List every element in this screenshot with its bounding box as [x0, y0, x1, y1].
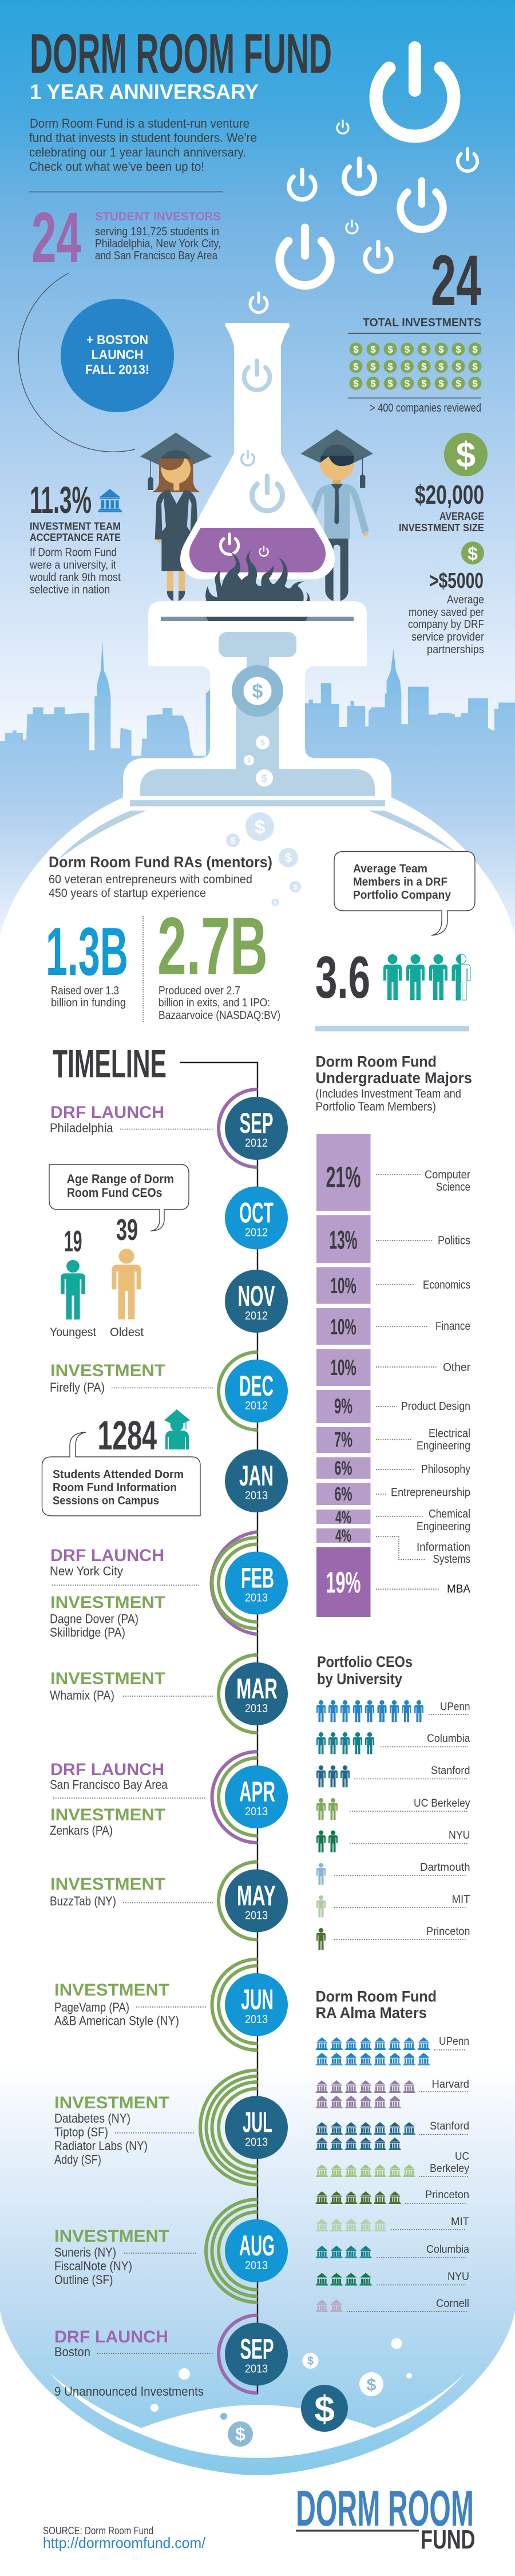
timeline node: Oct 2012: OCT [239, 1196, 274, 1228]
event: investments August: Suneris (NY) [54, 2245, 116, 2259]
event: DRF launch New York, investments: INVESTMENT [50, 1593, 165, 1612]
row: Columbia: Columbia [426, 2244, 469, 2255]
row: UC Berkeley [316, 2151, 469, 2177]
stat: average investment size: INVESTMENT SIZE [399, 522, 484, 534]
falling coins in flask: $ [293, 883, 298, 891]
event: DRF launch Boston [54, 2328, 213, 2359]
flask neck and cone [180, 323, 335, 579]
timeline node: Sep 2012: 2012 [245, 1137, 268, 1149]
bar: finance: 10% [330, 1315, 356, 1340]
stat: acceptance rate [29, 479, 122, 596]
age figures: Youngest [50, 1326, 96, 1339]
collector tray [140, 769, 375, 796]
power icons in flask [241, 361, 283, 511]
stat: student investors: STUDENT INVESTORS [95, 210, 221, 223]
timeline node: Oct 2012: 2012 [245, 1226, 268, 1239]
stat: money saved: partnerships [427, 643, 484, 656]
stat: money saved: $ [468, 543, 478, 564]
row: NYU: NYU [447, 2271, 469, 2283]
row: Stanford [316, 1765, 470, 1787]
timeline node: Nov 2012: 2012 [245, 1310, 268, 1322]
bar: politics [316, 1215, 470, 1263]
timeline node: Sep 2013: SEP [240, 2333, 274, 2365]
white mound in fluid [49, 2373, 466, 2458]
row: MIT: MIT [452, 1894, 470, 1906]
timeline node: Dec 2012: 2012 [245, 1400, 268, 1412]
event: DRF launch New York, investments: New York City [50, 1564, 123, 1578]
event: DRF launch New York, investments: Skillbridge (PA) [50, 1625, 125, 1639]
valve coin: $ [252, 681, 263, 702]
timeline node: Jan 2013: JAN [239, 1460, 274, 1492]
row: UPenn [316, 2036, 469, 2065]
stat: acceptance rate: If Dorm Room Fund [30, 546, 117, 559]
chart heading: portfolio CEOs: by University [317, 1670, 402, 1688]
bar: chemical engineering: 4% [335, 1507, 351, 1527]
bar: economics: Economics [423, 1279, 470, 1291]
bar: chemical engineering [316, 1507, 470, 1533]
dollar coin grid: $$$$$$$$ [353, 344, 478, 355]
callout: information sessions: Students Attended Dorm [53, 1468, 184, 1481]
power icons in liquid [220, 534, 268, 556]
callout: age range of CEOs: Age Range of Dorm [66, 1172, 174, 1186]
falling coins in flask: $ [231, 836, 236, 846]
graduate: man [300, 429, 373, 601]
bubbles and coins in fluid: $ [307, 2355, 314, 2368]
row: UPenn: UPenn [440, 1701, 470, 1713]
timeline node: Apr 2013: APR [239, 1776, 275, 1808]
row: MIT: MIT [451, 2216, 469, 2228]
icons: people [383, 954, 470, 1000]
event: investments August: FiscalNote (NY) [54, 2259, 132, 2273]
event: investment BuzzTab [50, 1875, 213, 1909]
event: investments July: Databetes (NY) [54, 2111, 130, 2125]
age figures: 19 [64, 1225, 82, 1258]
timeline node: May 2013 [219, 1862, 288, 1939]
bar: product design: Product Design [401, 1400, 470, 1413]
bar: chemical engineering: Engineering [417, 1520, 470, 1533]
event: investments July [54, 2093, 194, 2167]
footer logo [296, 2480, 475, 2554]
bar: entrepreneurship: 6% [334, 1484, 352, 1506]
timeline heading: TIMELINE [53, 1041, 167, 1086]
bar: electrical engineering: 7% [334, 1428, 352, 1452]
row: UC Berkeley: UC [455, 2151, 469, 2163]
event: investments July: Radiator Labs (NY) [54, 2139, 148, 2153]
Boston launch badge [61, 299, 174, 412]
chart heading: RA alma maters [316, 1988, 437, 2021]
row: MIT [316, 2216, 469, 2231]
row: NYU: NYU [449, 1830, 470, 1842]
event: DRF launch Philadelphia: DRF LAUNCH [50, 1103, 164, 1122]
callout: average team members: Members in a DRF [353, 876, 447, 888]
bottom fluid of flask [0, 2061, 515, 2475]
event: investment PageVamp, A&B: A&B American Style (NY) [54, 2014, 179, 2028]
timeline node: Jun 2013 [212, 1959, 288, 2050]
tray shelf [130, 800, 385, 806]
timeline node: Sep 2013: 2013 [245, 2363, 268, 2376]
stat: student investors: and San Francisco Bay Area [95, 250, 218, 262]
bar: product design [316, 1390, 470, 1423]
chart heading: RA alma maters: RA Alma Maters [316, 2004, 427, 2021]
graduate: woman [140, 433, 212, 601]
event: DRF launch Boston: DRF LAUNCH [54, 2328, 168, 2346]
stat: total investments: TOTAL INVESTMENTS [363, 317, 481, 329]
bubbles and coins in fluid: $ [367, 2376, 377, 2395]
falling coins in chute: $ [247, 757, 251, 764]
bar: economics [316, 1267, 470, 1304]
bar: philosophy [316, 1457, 470, 1479]
falling coins in flask: $ [274, 900, 277, 906]
timeline node: Mar 2013: 2013 [245, 1702, 268, 1715]
stat: exits 2.7B [157, 901, 280, 1022]
row: NYU [316, 2271, 469, 2285]
chart: RA alma maters [316, 2036, 469, 2312]
timeline node: Feb 2013: FEB [241, 1562, 274, 1594]
mentors heading: 60 veteran entrepreneurs with combined [49, 873, 252, 886]
bar: other: 10% [330, 1356, 356, 1380]
flask burner and lower flask body [0, 601, 515, 2576]
stat: acceptance rate: INVESTMENT TEAM [30, 521, 121, 532]
event: DRF launch San Francisco, investment [50, 1760, 206, 1838]
stat: exits 2.7B: 2.7B [157, 901, 268, 992]
bar: entrepreneurship [316, 1483, 470, 1506]
row: Stanford: Stanford [431, 1765, 470, 1777]
timeline node: Oct 2012 [225, 1186, 288, 1249]
bar: electrical engineering: Electrical [429, 1428, 470, 1440]
event: DRF launch San Francisco, investment: INVESTMENT [50, 1805, 165, 1824]
stat: acceptance rate: would rank 9th most [29, 571, 121, 584]
age figures: Oldest [110, 1326, 144, 1339]
bar: computer science: Computer [425, 1169, 470, 1182]
valve stem [247, 657, 269, 669]
stat: total investments: > 400 companies reviewed [370, 402, 481, 414]
stat: 3.6 team members: 3.6 [315, 945, 370, 1011]
event: DRF launch San Francisco, investment: San Francisco Bay Area [50, 1777, 168, 1792]
thin arc around Boston badge [18, 273, 135, 452]
timeline node: Aug 2013: AUG [239, 2230, 275, 2262]
bar: chemical engineering: Chemical [429, 1508, 470, 1520]
intro text: Check out what we've been up to! [29, 159, 204, 174]
event: investments August: Outline (SF) [54, 2273, 113, 2287]
stat: exits 2.7B: billion in exits, and 1 IPO: [159, 997, 270, 1009]
timeline spine [180, 1062, 258, 2394]
timeline node: Aug 2013 [206, 2199, 288, 2302]
event: DRF launch New York, investments: DRF LAUNCH [50, 1546, 164, 1565]
dollar coin grid [349, 342, 482, 390]
chart heading: undergraduate majors: Dorm Room Fund [316, 1053, 437, 1070]
bar: finance [316, 1308, 470, 1345]
event: DRF launch Philadelphia: Philadelphia [50, 1121, 113, 1135]
row: Harvard [316, 2079, 469, 2108]
footer logo: FUND [421, 2524, 475, 2554]
bar: entrepreneurship: Entrepreneurship [391, 1486, 470, 1499]
bubbles and coins in fluid [150, 2338, 412, 2447]
stat: average investment size: AVERAGE [439, 511, 484, 522]
right inner flask highlight [369, 811, 458, 854]
event: DRF launch Boston: Boston [54, 2345, 90, 2359]
intro text: fund that invests in student founders. We're [29, 131, 257, 145]
bubbles and coins in fluid: $ [314, 2388, 335, 2429]
timeline node: Dec 2012 [219, 1352, 288, 1430]
callout: average team members: Average Team [353, 863, 427, 875]
intro text: Dorm Room Fund is a student-run venture [30, 116, 249, 131]
chart heading: RA alma maters: Dorm Room Fund [316, 1988, 437, 2005]
row: Columbia [316, 1732, 470, 1754]
intro text [29, 116, 257, 174]
bar: MBA: 19% [326, 1566, 360, 1599]
timeline node: Sep 2013 [219, 2315, 288, 2393]
stat: money saved: company by DRF [408, 618, 484, 631]
bar: information systems: Information [417, 1541, 470, 1554]
bar: finance: Finance [435, 1320, 470, 1333]
bar: computer science [316, 1134, 470, 1211]
chart heading: undergraduate majors: Undergraduate Majors [316, 1069, 472, 1086]
source credit: SOURCE: Dorm Room Fund [43, 2525, 153, 2537]
stat: money saved: service provider [411, 631, 484, 643]
bar: MBA [316, 1547, 471, 1617]
callout: information sessions: Room Fund Information [53, 1481, 177, 1494]
chart: undergraduate majors [316, 1134, 471, 1617]
row: UPenn: UPenn [439, 2036, 469, 2048]
burner slot flame shadow [206, 617, 308, 621]
event: investments July: Addy (SF) [54, 2152, 101, 2167]
row: Dartmouth [316, 1862, 470, 1885]
event: investment Whamix: INVESTMENT [50, 1669, 165, 1688]
subtitle: 1 YEAR ANNIVERSARY [30, 80, 259, 104]
event: DRF launch San Francisco, investment: DRF LAUNCH [50, 1760, 164, 1779]
row: UC Berkeley: Berkeley [430, 2163, 469, 2175]
stat: raised 1.3B [46, 914, 128, 1009]
event: investment BuzzTab: INVESTMENT [50, 1875, 165, 1894]
chart heading: portfolio CEOs: Portfolio CEOs [317, 1653, 413, 1670]
row: Princeton: Princeton [426, 1926, 470, 1938]
falling coins in flask [226, 812, 301, 906]
event: investments August: INVESTMENT [54, 2227, 169, 2246]
event: investment PageVamp, A&B [54, 1981, 206, 2028]
bar: information systems: 4% [335, 1526, 351, 1546]
timeline node: Apr 2013: 2013 [245, 1805, 268, 1818]
row: Cornell [316, 2298, 469, 2312]
falling coins in chute: $ [262, 773, 268, 785]
callout: information sessions: Sessions on Campus [53, 1495, 159, 1507]
timeline node: Sep 2012 [219, 1089, 288, 1167]
chart heading: undergraduate majors [316, 1053, 472, 1113]
dollar coin grid: $$$$$$$$ [353, 361, 478, 372]
power icons rising [250, 48, 477, 313]
event: DRF launch San Francisco, investment: Zenkars (PA) [50, 1823, 113, 1838]
coin chute [236, 707, 279, 770]
event: investment Firefly: INVESTMENT [50, 1361, 165, 1380]
stat: average investment size: $20,000 [415, 480, 484, 509]
stat: 3.6 team members [316, 954, 470, 1001]
bar: other: Other [443, 1361, 470, 1374]
bar: electrical engineering: Engineering [417, 1440, 470, 1452]
bar: philosophy: Philosophy [421, 1463, 470, 1476]
mentors heading: Dorm Room Fund RAs (mentors) [49, 854, 272, 871]
timeline node: Jun 2013: JUN [241, 1984, 274, 2016]
event: DRF launch Philadelphia [50, 1103, 213, 1135]
burner slot [161, 617, 354, 621]
stat: raised 1.3B: billion in funding [51, 997, 126, 1009]
stat: student investors [31, 198, 221, 278]
stat: total investments [348, 241, 482, 414]
row: Columbia: Columbia [427, 1733, 470, 1745]
timeline node: Feb 2013 [211, 1532, 288, 1634]
city skyline [0, 640, 515, 950]
timeline node: Dec 2012: DEC [239, 1370, 274, 1402]
bar: politics: Politics [438, 1234, 470, 1247]
falling coins in chute [244, 736, 273, 787]
timeline node: Jul 2013: 2013 [245, 2136, 268, 2149]
stat: student investors: serving 191,725 students in [95, 226, 219, 238]
stat: 1284 students: 1284 [97, 1413, 157, 1459]
timeline node: Mar 2013 [219, 1655, 288, 1733]
bar: MBA: MBA [447, 1583, 471, 1595]
timeline node: Jun 2013: 2013 [245, 2013, 268, 2026]
chart: portfolio CEOs by university [316, 1700, 470, 1950]
left inner flask highlight [56, 811, 146, 862]
stat: money saved: Average [447, 594, 484, 606]
row: Stanford [316, 2120, 469, 2150]
timeline node: Aug 2013: 2013 [245, 2259, 268, 2272]
unannounced investments note: 9 Unannounced Investments [54, 2384, 204, 2399]
event: investments July: Tiptop (SF) [54, 2125, 108, 2139]
timeline node: Nov 2012: NOV [238, 1280, 275, 1312]
timeline node: Jul 2013: JUL [243, 2107, 272, 2139]
falling coins in chute: $ [260, 738, 265, 747]
bar: computer science: 21% [326, 1161, 360, 1194]
mentors heading: 450 years of startup experience [49, 887, 206, 900]
stat: exits 2.7B: Bazaarvoice (NASDAQ:BV) [159, 1009, 280, 1022]
burner flame [205, 550, 310, 601]
falling coins in flask: $ [255, 816, 265, 837]
bubbles and coins in fluid: $ [235, 2424, 245, 2444]
row: Stanford: Stanford [430, 2120, 469, 2132]
intro text: celebrating our 1 year launch anniversary. [29, 145, 246, 159]
chart heading: undergraduate majors: (Includes Investment Team and [316, 1088, 461, 1100]
stat: money saved [408, 542, 484, 656]
dollar coin grid: $$$$$$$$ [353, 378, 478, 389]
event: investment BuzzTab: BuzzTab (NY) [50, 1894, 116, 1909]
timeline node: Jul 2013 [200, 2070, 288, 2184]
event: investment Whamix: Whamix (PA) [50, 1688, 114, 1702]
stat: exits 2.7B: Produced over 2.7 [159, 985, 240, 997]
timeline node: Sep 2012: SEP [239, 1107, 274, 1139]
age figures: 39 [116, 1214, 138, 1247]
timeline node: May 2013: MAY [237, 1880, 276, 1912]
event: investments August [54, 2227, 197, 2287]
age figures [50, 1214, 144, 1339]
callout: average team members [334, 852, 475, 935]
stat: acceptance rate: ACCEPTANCE RATE [30, 532, 121, 543]
timeline node: Apr 2013 [212, 1752, 288, 1843]
event: DRF launch New York, investments: Dagne Dover (PA) [50, 1612, 138, 1626]
event: investment Whamix [50, 1669, 213, 1702]
stat: total investments: 24 [431, 241, 481, 321]
bar: information systems [316, 1526, 470, 1566]
event: investment Firefly [50, 1361, 213, 1394]
chart heading: portfolio CEOs [317, 1653, 413, 1688]
row: Columbia [316, 2244, 469, 2258]
stat: money saved: >$5000 [429, 569, 484, 593]
row: UC Berkeley [316, 1797, 470, 1820]
stat: average investment size: $ [456, 436, 476, 475]
timeline node: Mar 2013: MAR [236, 1673, 278, 1705]
callout: age range of CEOs: Room Fund CEOs [67, 1186, 163, 1200]
bar: politics: 13% [330, 1225, 357, 1255]
timeline node: Jan 2013: 2013 [245, 1490, 268, 1502]
event: DRF launch New York, investments [50, 1546, 199, 1639]
source credit [43, 2525, 206, 2551]
stat: acceptance rate: selective in nation [30, 584, 110, 596]
event: investments July: INVESTMENT [54, 2093, 169, 2112]
row: Princeton [316, 2189, 469, 2204]
stat: average investment size [399, 433, 488, 534]
row: Princeton [316, 1926, 470, 1950]
stat: acceptance rate: were a university, it [29, 559, 116, 571]
icon: university building [98, 489, 122, 512]
row: UC Berkeley: UC Berkeley [414, 1797, 470, 1809]
flask liquid [189, 528, 326, 572]
valve handle [219, 632, 296, 657]
Boston launch badge: FALL 2013! [85, 362, 149, 377]
stat: money saved: money saved per [409, 606, 484, 619]
source credit: http://dormroomfund.com/ [43, 2534, 206, 2551]
bar: information systems: Systems [433, 1553, 470, 1566]
row: Dartmouth: Dartmouth [420, 1862, 470, 1874]
row: Harvard: Harvard [431, 2079, 469, 2091]
stat: raised 1.3B: 1.3B [46, 914, 128, 990]
timeline node: Feb 2013: 2013 [245, 1591, 268, 1604]
stat: acceptance rate: 11.3% [30, 479, 92, 521]
callout: information sessions [42, 1432, 200, 1516]
timeline node: Nov 2012 [225, 1270, 288, 1333]
Boston launch badge: + BOSTON [86, 333, 148, 347]
Boston launch badge: LAUNCH [92, 347, 143, 362]
timeline node: May 2013: 2013 [245, 1910, 268, 1922]
valve coin [232, 665, 283, 717]
bar: computer science: Science [436, 1181, 470, 1194]
row: UPenn [316, 1700, 470, 1722]
row: NYU [316, 1830, 470, 1852]
event: investment PageVamp, A&B: INVESTMENT [54, 1981, 169, 2000]
event: investment Firefly: Firefly (PA) [50, 1380, 105, 1394]
row: Princeton: Princeton [425, 2189, 469, 2201]
stat: raised 1.3B: Raised over 1.3 [51, 985, 119, 997]
row: Cornell: Cornell [436, 2298, 469, 2310]
callout: age range of CEOs [49, 1164, 189, 1231]
mentors heading [49, 854, 272, 900]
event: investment PageVamp, A&B: PageVamp (PA) [54, 2000, 129, 2014]
chart heading: undergraduate majors: Portfolio Team Members) [316, 1100, 436, 1113]
bar: economics: 10% [330, 1274, 356, 1298]
timeline node: Jan 2013 [225, 1449, 288, 1512]
bar: other [316, 1349, 470, 1386]
bar: philosophy: 6% [334, 1457, 352, 1479]
callout: average team members: Portfolio Company [353, 889, 451, 902]
falling coins in flask: $ [285, 851, 292, 865]
row: MIT [316, 1894, 470, 1917]
stat: student investors: Philadelphia, New York City, [95, 238, 221, 250]
stat: student investors: 24 [31, 198, 81, 278]
bar: product design: 9% [334, 1394, 352, 1418]
icon: graduate [164, 1409, 190, 1449]
bar: electrical engineering [316, 1427, 470, 1453]
